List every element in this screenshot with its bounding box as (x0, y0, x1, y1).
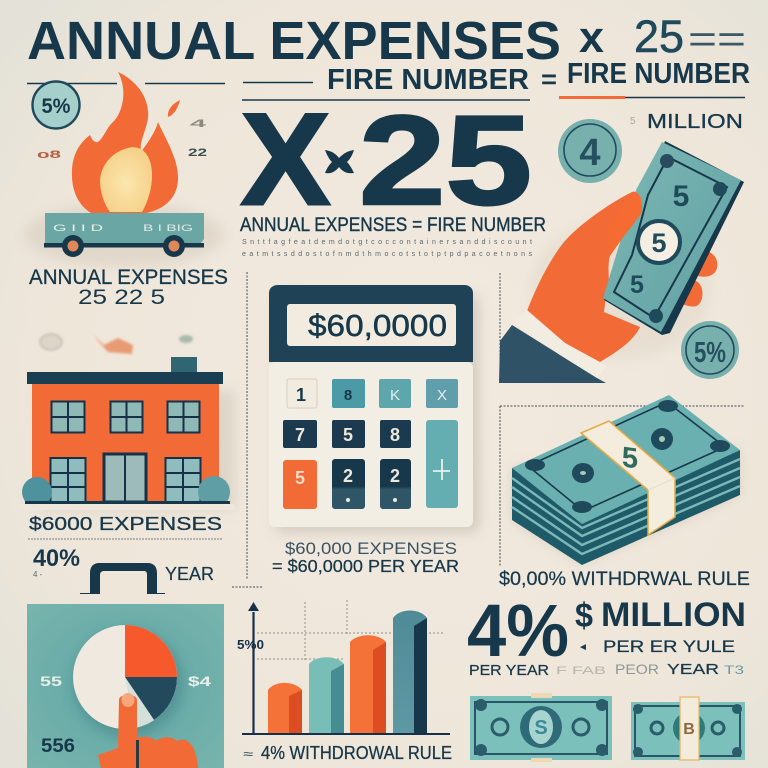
headline: 4 percent and million: $ (575, 597, 593, 635)
icon: banknote with center coin (470, 693, 612, 762)
chart: rising bars: 5%0 (237, 637, 264, 652)
caption: expenses: $6000 EXPENSES (29, 513, 222, 534)
banknote: 5 (651, 228, 667, 258)
icon: orange building (20, 357, 235, 510)
icon: coin 5 percent: 5% (694, 337, 726, 369)
small decorative marks by flame: o8 (37, 149, 61, 161)
banknote: 5 (673, 180, 689, 213)
suit sleeve (499, 325, 606, 383)
keypad: 7 (295, 425, 305, 445)
panel: pie chart on teal: 55 (40, 673, 62, 689)
equation subtitle and fine print: e a t m t s s d d o s t o f n m d t h m o c o t s t o t p t p d p a c o e t n o n s (242, 251, 532, 258)
caption: calculator expenses: $60,000 EXPENSES (285, 539, 457, 558)
headline: 4 percent and million: PEOR (615, 661, 659, 677)
display value: $60,0000 (308, 308, 447, 343)
bus body (44, 213, 204, 257)
banknote: 5 (630, 271, 644, 299)
title: annual expenses formula: FIRE NUMBER (327, 64, 529, 96)
big multiplier: X x 25: 25 (359, 89, 532, 231)
bar 1 (268, 683, 302, 733)
bus body: B I BIG (143, 223, 193, 233)
panel: pie chart on teal: $4 (188, 673, 211, 689)
title: annual expenses formula: FIRE NUMBER (567, 58, 750, 90)
caption: calculator expenses (272, 539, 459, 576)
icon: pointing hand (98, 693, 198, 768)
paper strap: 5 (622, 442, 638, 476)
keypad: 5 (343, 425, 353, 445)
paper strap (581, 421, 675, 535)
fingers behind bill (682, 250, 717, 307)
title: annual expenses formula: 25 (634, 11, 684, 62)
caption: calculator expenses: = $60,0000 PER YEAR (272, 556, 459, 576)
divider lines (232, 272, 745, 587)
keypad (283, 379, 458, 509)
title: annual expenses formula: = (541, 64, 557, 94)
keypad: 5 (295, 468, 305, 488)
headline: 4 percent and million: MILLION (601, 596, 746, 634)
caption: chart withdrawal rule: ≈ (243, 747, 254, 761)
headline: 4 percent and million: ◄ (578, 642, 588, 653)
icon: 5 percent badge: 5% (42, 95, 71, 118)
equation subtitle and fine print: S n t t f a g f e a t d e m d o t g t c o c c o n t a i n e r s a n d d i s c o u n t (242, 239, 532, 246)
header rules (27, 82, 745, 100)
icon: coin 5 percent (681, 321, 739, 379)
icon: hand holding banknote (499, 141, 744, 383)
headline: 4 percent and million: F FAB (556, 665, 606, 677)
keypad: 2 (343, 466, 353, 486)
keypad: 1 (296, 385, 306, 405)
bar 3 (350, 635, 386, 733)
caption: annual expenses (29, 266, 228, 309)
icon: coin 4: 4 (579, 132, 601, 174)
decorative smudges above building (40, 334, 193, 354)
title: annual expenses formula: ANNUAL EXPENSES (27, 11, 561, 71)
keypad: 8 (344, 387, 352, 404)
icon: banknote with center coin: S (534, 717, 548, 739)
axis (252, 612, 255, 734)
caption: expenses: YEAR (165, 564, 214, 584)
bar 4 (393, 610, 427, 733)
equation subtitle and fine print: ANNUAL EXPENSES = FIRE NUMBER (240, 214, 546, 236)
headline: 4 percent and million: PER YEAR (469, 662, 549, 679)
caption: expenses (28, 513, 223, 584)
headline: 4 percent and million (467, 589, 746, 679)
big multiplier: X x 25 (241, 86, 532, 232)
equation subtitle and fine print (240, 214, 546, 258)
headline: 4 percent and million: PER ER YULE (603, 638, 735, 656)
headline: 4 percent and million: T3 (724, 663, 744, 677)
headline: 4 percent and million: 4% (467, 589, 569, 672)
thumb (606, 192, 642, 252)
keypad: 2 (390, 466, 400, 486)
icon: flame on bus (24, 72, 224, 267)
banknote (603, 141, 744, 335)
windows upper (51, 401, 200, 433)
keypad: X (437, 387, 447, 404)
label: million: MILLION (647, 111, 743, 133)
caption: annual expenses: 25 22 5 (78, 286, 165, 309)
caption: expenses: 4 - (33, 570, 43, 579)
headline: 4 percent and million: YEAR (667, 661, 719, 678)
windows lower and door (50, 454, 201, 502)
caption: annual expenses: ANNUAL EXPENSES (29, 266, 228, 289)
bus body: G I I D (53, 223, 104, 233)
chart: rising bars (237, 600, 450, 734)
small decorative marks by flame (37, 118, 208, 161)
caption: withdrawal rule: $0,00% WITHDRWAL RULE (499, 569, 750, 590)
title: annual expenses formula: x (579, 13, 605, 62)
big multiplier: X x 25: X (241, 86, 330, 232)
panel: pie chart on teal (27, 604, 224, 768)
caption: expenses: 40% (33, 545, 80, 572)
icon: banknote with strap (631, 697, 745, 760)
panel: calculator (269, 285, 480, 533)
icon: banknote with strap: B (683, 721, 695, 738)
icon: briefcase handle (80, 563, 165, 594)
label: million: 5 (630, 116, 636, 127)
caption: chart withdrawal rule: 4% WITHDROWAL RULE (261, 742, 452, 763)
icon: stack of cash (512, 395, 740, 565)
small decorative marks by flame: 4 (190, 118, 208, 130)
palm (527, 192, 642, 362)
keypad: 8 (390, 425, 400, 445)
title: annual expenses formula (27, 11, 750, 96)
bar 2 (309, 657, 344, 733)
title: annual expenses formula: == (688, 19, 746, 61)
small decorative marks by flame: 22 (188, 147, 207, 159)
panel: pie chart on teal: 556 (41, 736, 75, 757)
icon: 5 percent badge (32, 82, 80, 128)
shirt cuff (514, 310, 606, 378)
icon: coin 4 (558, 119, 622, 183)
keypad: K (390, 387, 400, 404)
